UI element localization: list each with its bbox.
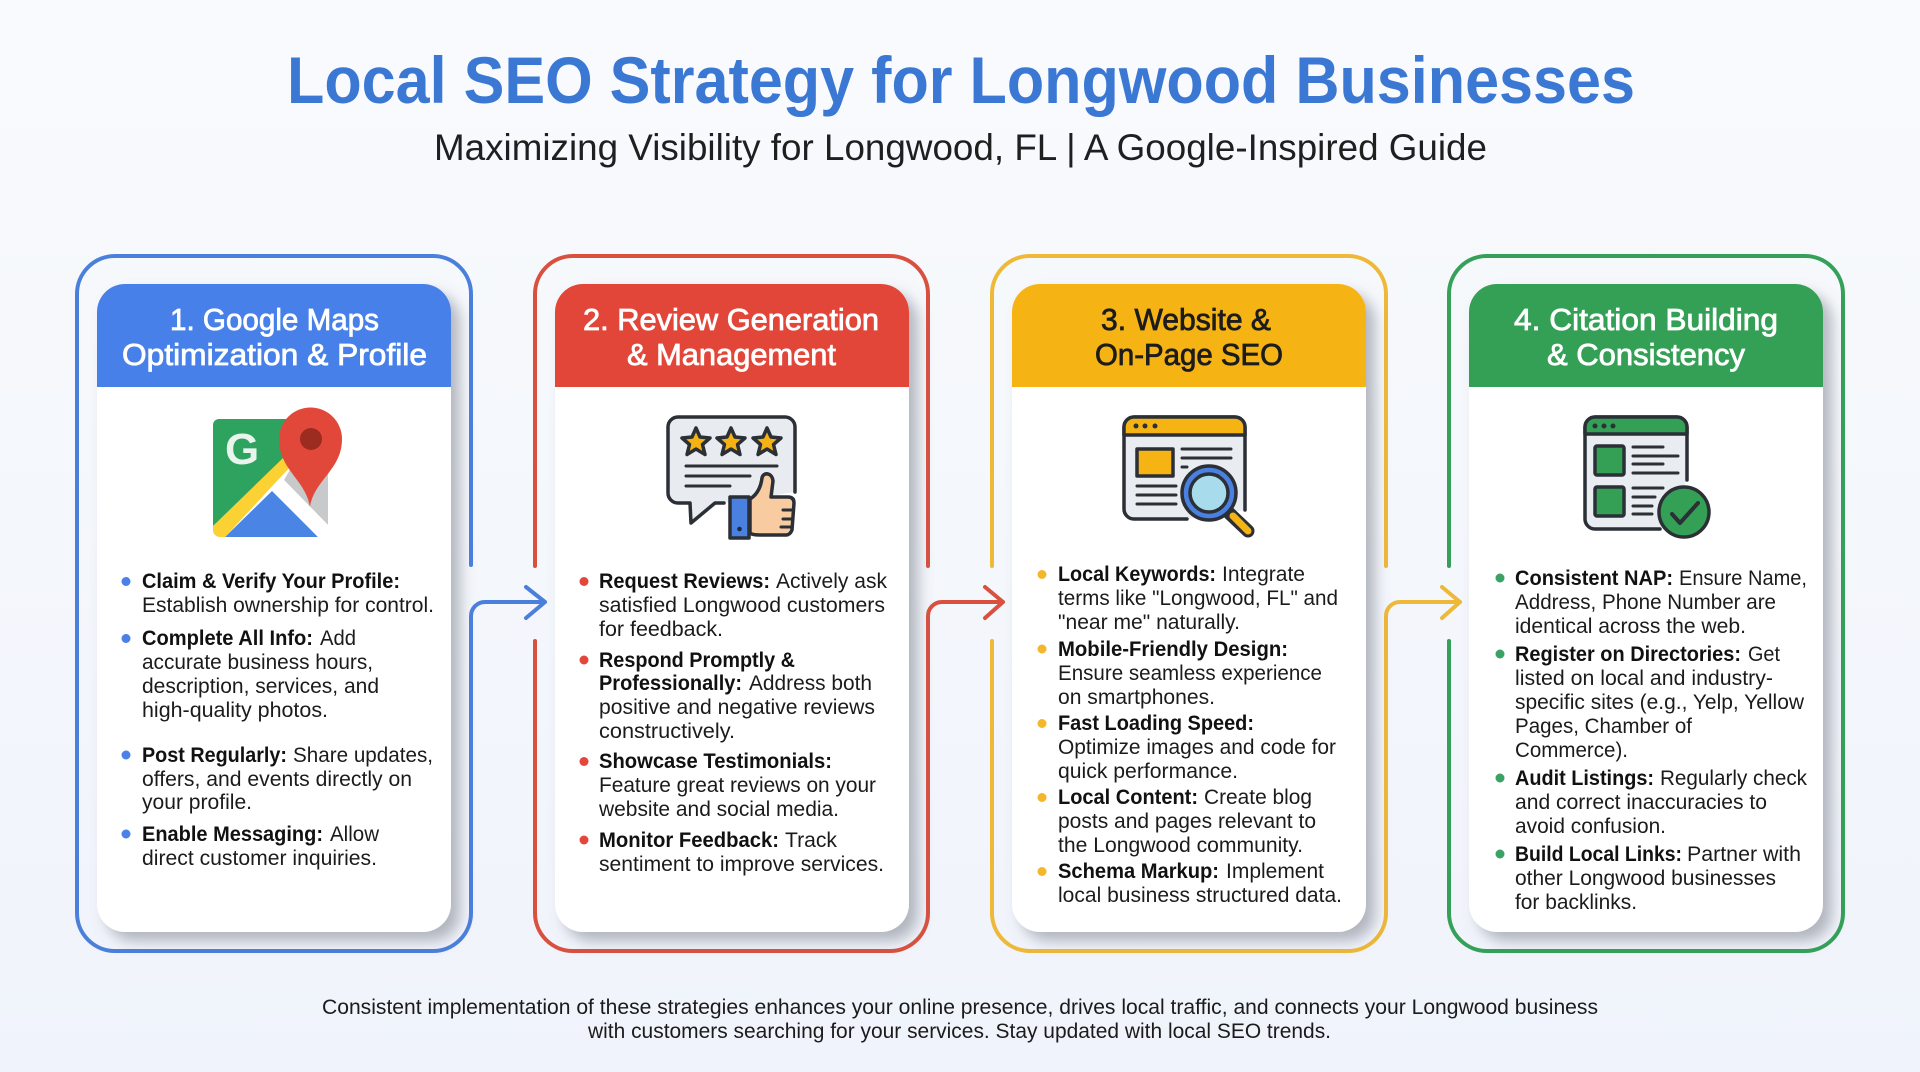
bullet: Schema Markup — [1038, 860, 1342, 907]
bullet: Local Keywords: Integrate — [1222, 563, 1305, 586]
bullet: Enable Messaging: Allow — [330, 823, 380, 846]
bullet: Respond Promptly & Professionally: constructively. — [599, 720, 735, 743]
bullet: Register on Directories: specific sites (e.g., Yelp, Yellow — [1515, 691, 1805, 714]
bullet: Request Reviews — [580, 570, 887, 641]
bullet: Request Reviews: Request Reviews: — [599, 570, 770, 593]
bullet: Register on Directories: Register on Directories: — [1515, 643, 1741, 666]
bullet: Consistent NAP — [1496, 567, 1807, 638]
bullet: Consistent NAP: Consistent NAP: — [1515, 567, 1673, 590]
icon: review bubble with stars and thumbs up — [668, 417, 795, 538]
bullet: Local Keywords: terms like "Longwood, FL" and — [1058, 587, 1338, 610]
bullet: Complete All Info — [122, 627, 379, 722]
bullet: Request Reviews: for feedback. — [599, 618, 723, 641]
bullet: Local Content: posts and pages relevant to — [1058, 810, 1316, 833]
bullet: Post Regularly — [122, 744, 433, 814]
bullet: Respond Promptly & Professionally: Respond Promptly & — [599, 649, 795, 672]
bullet: Post Regularly: Share updates, — [293, 744, 433, 767]
bullet: Request Reviews: Actively ask — [776, 570, 887, 593]
panel: 2. Review Generation & Management — [535, 256, 1003, 951]
bullet: Respond Promptly & Professionally — [580, 649, 875, 743]
bullet: Consistent NAP: Ensure Name, — [1679, 567, 1807, 590]
bullet: Post Regularly: offers, and events directly on — [142, 768, 412, 791]
panel: 4. Citation Building & Consistency — [1449, 256, 1843, 951]
icon: google maps pin: G — [225, 425, 259, 474]
bullet: Enable Messaging: Enable Messaging: — [142, 823, 323, 846]
bullet: Schema Markup: Implement — [1226, 860, 1324, 883]
bullet: Local Content: Create blog — [1204, 786, 1312, 809]
bullet: Audit Listings — [1496, 767, 1807, 838]
card body — [1469, 284, 1823, 932]
bullet: Local Content: the Longwood community. — [1058, 834, 1303, 857]
icon: listing page with check mark — [1585, 417, 1709, 537]
panel: 1. Google Maps Optimization & Profile — [77, 256, 545, 951]
icon: web page with magnifying glass — [1124, 417, 1248, 531]
panel frame — [1449, 256, 1843, 951]
bullet: Register on Directories: listed on local and industry- — [1515, 667, 1773, 690]
bullet: Showcase Testimonials: Feature great reviews on your — [599, 774, 876, 797]
bullet: Respond Promptly & Professionally: Professionally: — [599, 672, 742, 695]
card header: Optimization & Profile — [122, 337, 427, 372]
bullet: Monitor Feedback: sentiment to improve services. — [599, 853, 884, 876]
bullet: Build Local Links: for backlinks. — [1515, 891, 1637, 914]
bullet: Respond Promptly & Professionally: positive and negative reviews — [599, 696, 875, 719]
icon: google maps pin — [213, 408, 342, 537]
bullet: Request Reviews: satisfied Longwood customers — [599, 594, 885, 617]
bullet: Complete All Info: high-quality photos. — [142, 699, 328, 722]
bullet: Showcase Testimonials — [580, 750, 876, 821]
bullet: Enable Messaging — [122, 823, 380, 870]
bullet: Consistent NAP: identical across the web. — [1515, 615, 1746, 638]
bullet: Mobile-Friendly Design: on smartphones. — [1058, 686, 1215, 709]
bullet: Register on Directories: Get — [1748, 643, 1780, 666]
bullet: Register on Directories: Pages, Chamber of — [1515, 715, 1692, 738]
bullet: Enable Messaging: direct customer inquiries. — [142, 847, 377, 870]
bullet: Complete All Info: accurate business hours, — [142, 651, 373, 674]
card header: & Management — [627, 337, 836, 372]
card body — [1012, 284, 1366, 932]
card header: 3. Website & — [1101, 302, 1271, 337]
bullet: Fast Loading Speed — [1038, 712, 1336, 783]
card header — [97, 284, 451, 387]
footer note: Consistent implementation of these strategies enhances your online presence, drives local traffic, and connects your Longwood business — [322, 996, 1598, 1019]
bullet: Build Local Links: other Longwood businesses — [1515, 867, 1776, 890]
bullet: Audit Listings: and correct inaccuracies to — [1515, 791, 1767, 814]
bullet: Schema Markup: local business structured data. — [1058, 884, 1342, 907]
bullet: Local Keywords — [1038, 563, 1338, 634]
bullet: Register on Directories — [1496, 643, 1805, 762]
card header — [555, 284, 909, 387]
bullet: Register on Directories: Commerce). — [1515, 739, 1628, 762]
bullet: Local Keywords: "near me" naturally. — [1058, 611, 1240, 634]
bullet: Claim & Verify Your Profile: Establish ownership for control. — [142, 594, 434, 617]
panel: 3. Website & On-Page SEO — [992, 256, 1460, 951]
bullet: Audit Listings: Audit Listings: — [1515, 767, 1654, 790]
bullet: Post Regularly: your profile. — [142, 791, 252, 814]
bullet: Complete All Info: Complete All Info: — [142, 627, 313, 650]
bullet: Claim & Verify Your Profile: Claim & Verify Your Profile: — [142, 570, 400, 593]
bullet: Showcase Testimonials: Showcase Testimonials: — [599, 750, 832, 773]
bullet: Fast Loading Speed: Fast Loading Speed: — [1058, 712, 1254, 735]
card header: 4. Citation Building — [1514, 302, 1778, 337]
bullet: Monitor Feedback: Monitor Feedback: — [599, 829, 779, 852]
bullet: Mobile-Friendly Design — [1038, 638, 1322, 709]
bullet: Audit Listings: avoid confusion. — [1515, 815, 1666, 838]
bullet: Mobile-Friendly Design: Ensure seamless experience — [1058, 662, 1322, 685]
bullet: Local Content — [1038, 786, 1316, 857]
bullet: Mobile-Friendly Design: Mobile-Friendly Design: — [1058, 638, 1288, 661]
card header: On-Page SEO — [1095, 337, 1283, 372]
subtitle: Maximizing Visibility for Longwood, FL | A Google-Inspired Guide — [434, 127, 1487, 168]
bullet: Build Local Links: Build Local Links: — [1515, 843, 1682, 866]
bullet: Local Keywords: Local Keywords: — [1058, 563, 1216, 586]
card header — [1469, 284, 1823, 387]
card header: & Consistency — [1547, 337, 1745, 372]
bullet: Build Local Links — [1496, 843, 1801, 914]
bullet: Monitor Feedback: Track — [785, 829, 837, 852]
bullet: Fast Loading Speed: Optimize images and code for — [1058, 736, 1336, 759]
bullet: Showcase Testimonials: website and social media. — [598, 798, 839, 821]
bullet: Consistent NAP: Address, Phone Number are — [1515, 591, 1776, 614]
bullet: Local Content: Local Content: — [1058, 786, 1198, 809]
title: Local SEO Strategy for Longwood Businesses — [287, 43, 1635, 117]
card header: 2. Review Generation — [583, 302, 879, 337]
footer note: with customers searching for your services. Stay updated with local SEO trends. — [587, 1020, 1331, 1043]
card header: 1. Google Maps — [170, 302, 379, 337]
bullet: Claim & Verify Your Profile — [122, 570, 434, 617]
card body — [97, 284, 451, 932]
panel frame with arrow to step 4 — [992, 256, 1460, 951]
bullet: Fast Loading Speed: quick performance. — [1058, 760, 1238, 783]
bullet: Post Regularly: Post Regularly: — [142, 744, 287, 767]
bullet: Respond Promptly & Professionally: Address both — [749, 672, 872, 695]
bullet: Audit Listings: Regularly check — [1660, 767, 1807, 790]
footer note — [322, 996, 1598, 1043]
bullet: Schema Markup: Schema Markup: — [1058, 860, 1219, 883]
bullet: Build Local Links: Partner with — [1687, 843, 1801, 866]
card header — [1012, 284, 1366, 387]
panel frame with arrow to step 2 — [77, 256, 545, 951]
bullet: Monitor Feedback — [580, 829, 884, 876]
card body — [555, 284, 909, 932]
panel frame with arrow to step 3 — [535, 256, 1003, 951]
bullet: Complete All Info: Add — [320, 627, 356, 650]
bullet: Complete All Info: description, services, and — [142, 675, 379, 698]
